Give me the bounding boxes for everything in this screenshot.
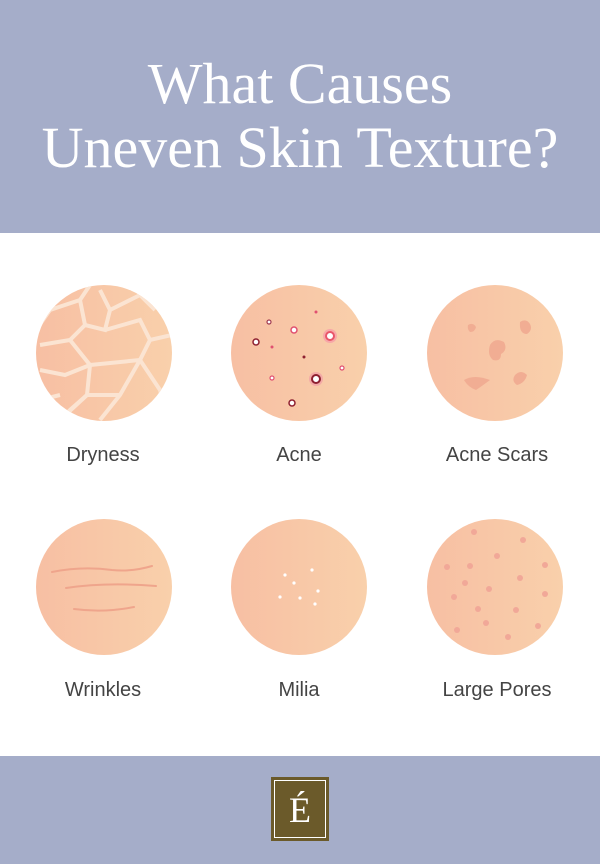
title: What Causes <box>148 51 452 116</box>
logo <box>271 777 329 841</box>
title: Uneven Skin Texture? <box>42 115 558 180</box>
icon: acne scars <box>427 285 563 421</box>
icon: wrinkles <box>36 519 172 655</box>
title <box>42 51 558 180</box>
label: dryness: Dryness <box>66 444 140 466</box>
icon: acne <box>231 285 367 421</box>
header band <box>0 0 600 233</box>
label: acne: Acne <box>276 444 322 466</box>
label: large pores: Large Pores <box>443 679 551 701</box>
label: acne scars: Acne Scars <box>446 444 548 466</box>
label: wrinkles: Wrinkles <box>65 679 141 701</box>
logo: É <box>289 790 311 830</box>
icon: large pores <box>427 519 563 655</box>
footer band <box>0 756 600 864</box>
icon: dryness <box>36 285 172 421</box>
circles illustration <box>36 285 563 655</box>
icon: milia <box>231 519 367 655</box>
label: milia: Milia <box>278 679 320 701</box>
